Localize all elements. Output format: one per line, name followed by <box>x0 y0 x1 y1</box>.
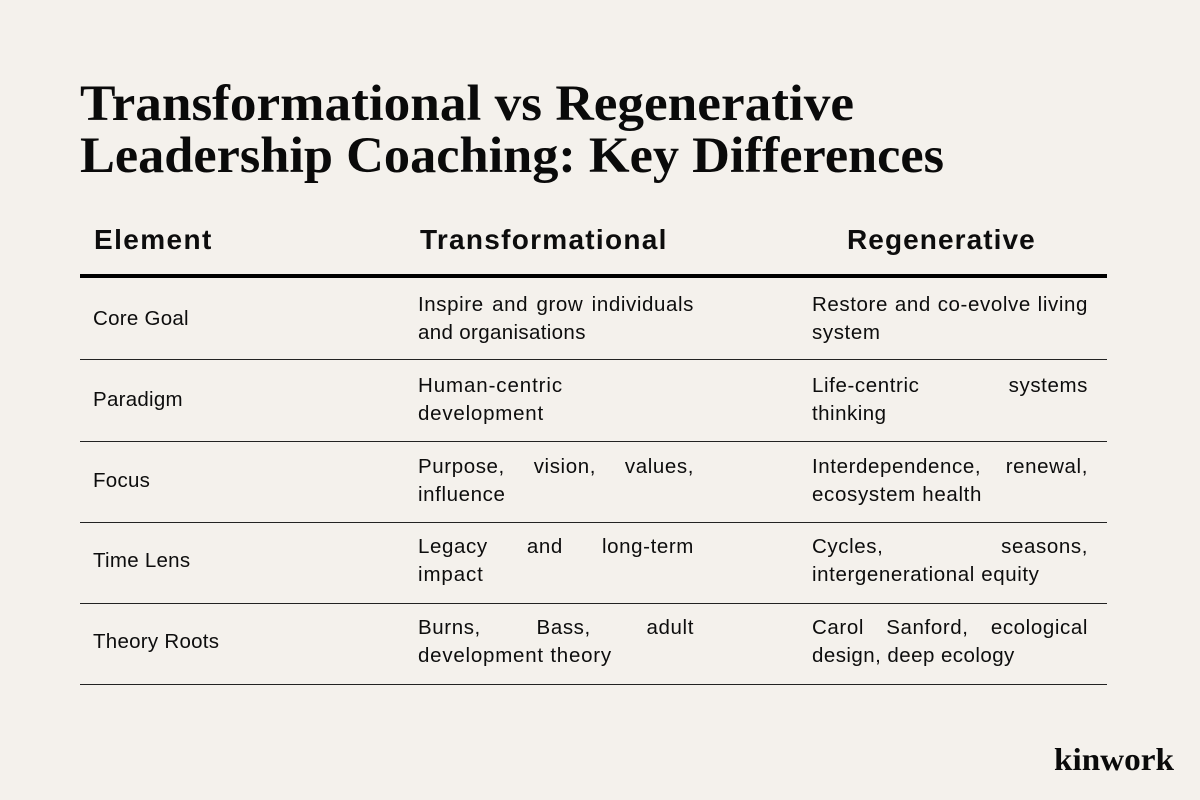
Paradigm transformational: development <box>418 402 544 425</box>
Focus transformational: Purpose, vision, values, <box>418 455 694 478</box>
Paradigm transformational <box>418 374 563 425</box>
table header: Element: Element <box>94 224 213 255</box>
Paradigm regenerative: thinking <box>812 402 886 425</box>
Focus regenerative: Interdependence, renewal, <box>812 455 1088 478</box>
Paradigm regenerative <box>812 374 1088 425</box>
Paradigm regenerative: Life-centric systems <box>812 374 1088 397</box>
title: Leadership Coaching: Key Differences <box>80 128 944 184</box>
row label: Focus: Focus <box>93 469 150 492</box>
Core Goal transformational: and organisations <box>418 321 586 344</box>
Theory Roots regenerative <box>812 616 1088 667</box>
table header: Regenerative: Regenerative <box>847 224 1036 255</box>
Theory Roots transformational <box>418 616 694 667</box>
title: Transformational vs Regenerative <box>80 76 854 132</box>
row label: Paradigm: Paradigm <box>93 388 183 411</box>
Core Goal transformational: Inspire and grow individuals <box>418 293 694 316</box>
Theory Roots transformational: Burns, Bass, adult <box>418 616 694 639</box>
Time Lens regenerative: Cycles, seasons, <box>812 535 1088 558</box>
row label: Core Goal: Core Goal <box>93 307 189 330</box>
Core Goal regenerative: Restore and co-evolve living <box>812 293 1088 316</box>
Core Goal regenerative <box>812 293 1088 344</box>
Theory Roots regenerative: design, deep ecology <box>812 644 1015 667</box>
title <box>80 76 944 184</box>
Focus regenerative <box>812 455 1088 506</box>
table header: Transformational: Transformational <box>420 224 668 255</box>
Theory Roots regenerative: Carol Sanford, ecological <box>812 616 1088 639</box>
Time Lens transformational: impact <box>418 563 484 586</box>
Time Lens transformational: Legacy and long-term <box>418 535 694 558</box>
Core Goal regenerative: system <box>812 321 881 344</box>
row label: Time Lens: Time Lens <box>93 549 190 572</box>
Core Goal transformational <box>418 293 694 344</box>
Time Lens regenerative: intergenerational equity <box>812 563 1040 586</box>
Time Lens regenerative <box>812 535 1088 586</box>
row label: Theory Roots: Theory Roots <box>93 630 219 653</box>
brand logo: kinwork: kinwork <box>1054 741 1174 777</box>
Focus regenerative: ecosystem health <box>812 483 982 506</box>
Theory Roots transformational: development theory <box>418 644 612 667</box>
header rule <box>80 274 1107 278</box>
Paradigm transformational: Human-centric <box>418 374 563 397</box>
Focus transformational: influence <box>418 483 505 506</box>
Focus transformational <box>418 455 694 506</box>
Time Lens transformational <box>418 535 694 586</box>
